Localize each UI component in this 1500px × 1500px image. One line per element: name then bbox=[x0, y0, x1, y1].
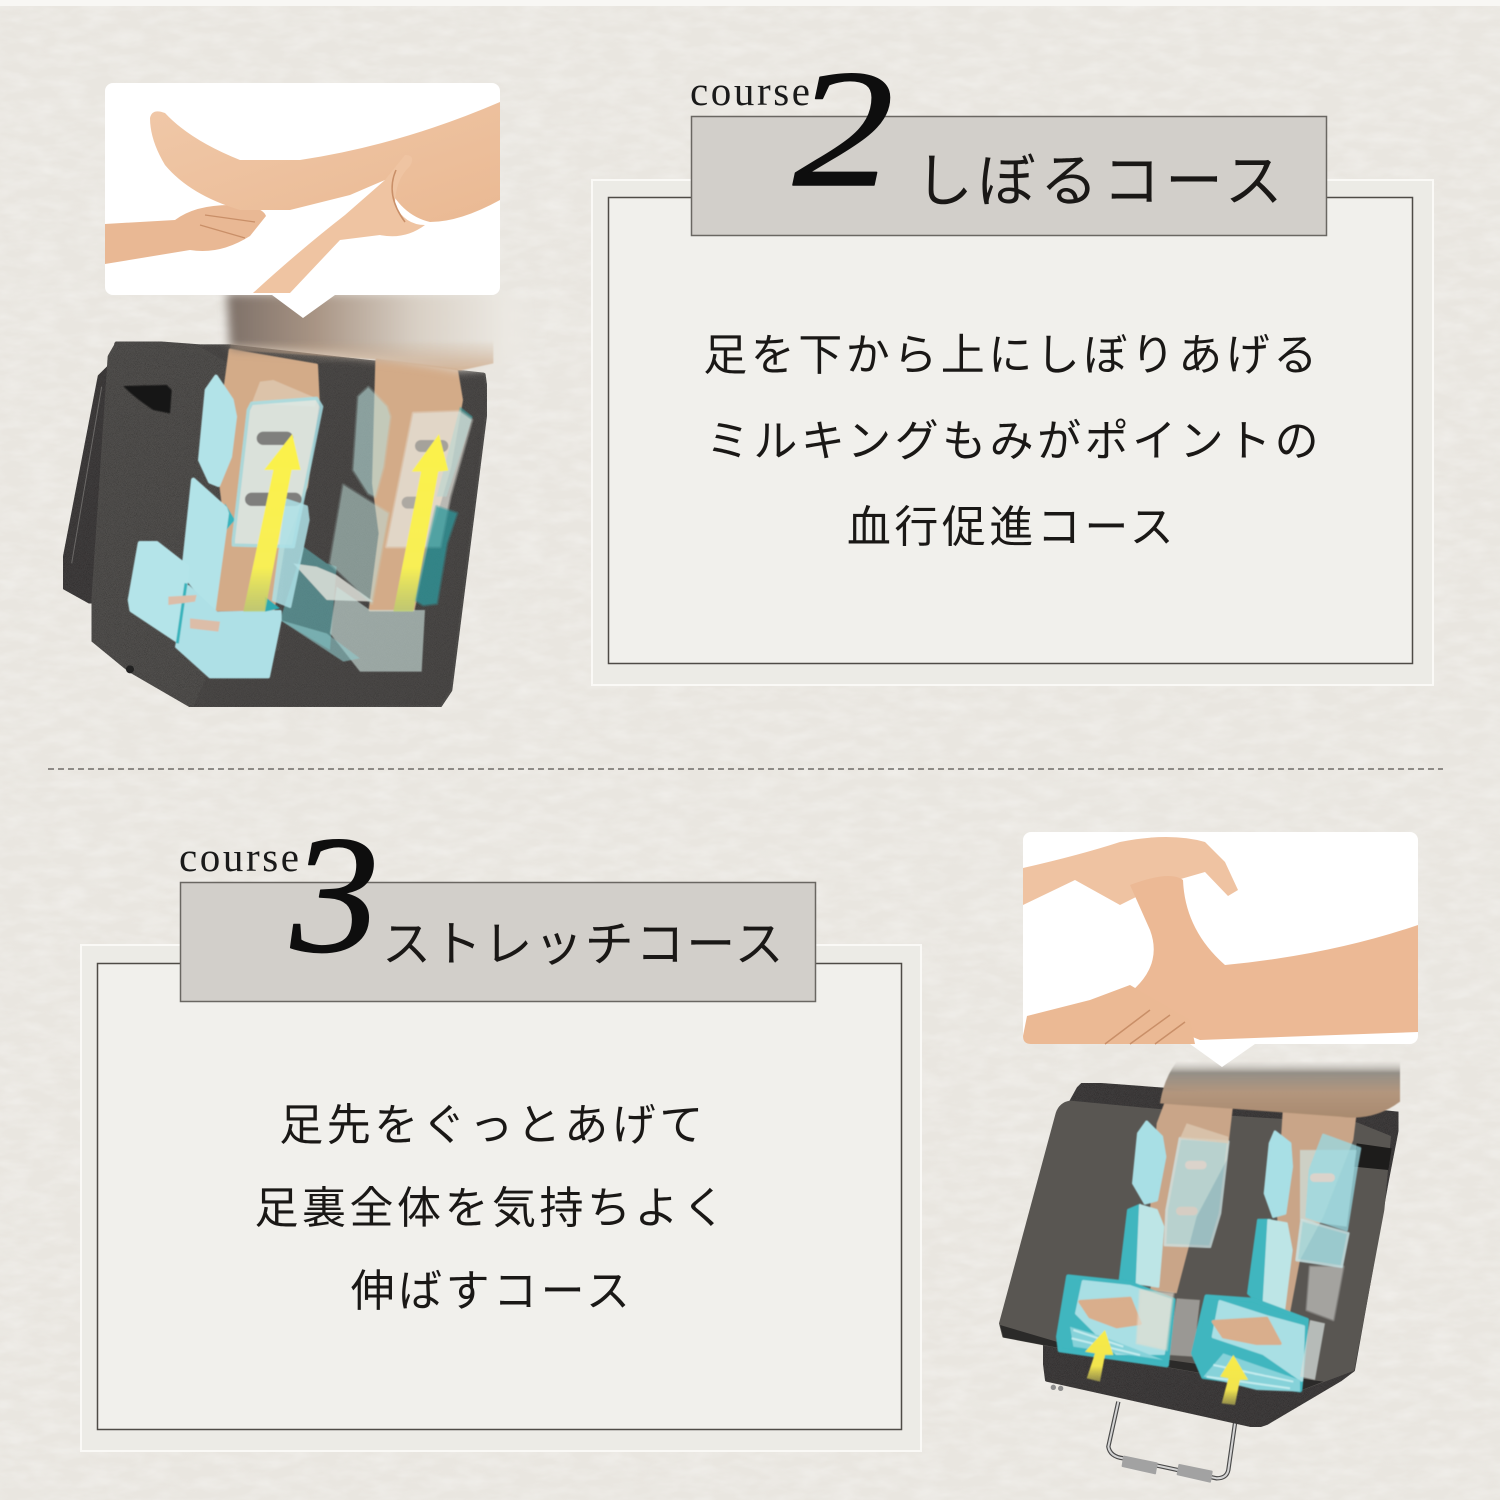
panel: course 2 frame bbox=[592, 180, 1433, 685]
text block: course 3 description: 足裏全体を気持ちよく bbox=[254, 1184, 730, 1233]
heading band: course 2 bbox=[692, 116, 1326, 236]
heading: しぼるコース: しぼるコース bbox=[915, 149, 1287, 214]
text block: course 2 description: 血行促進コース bbox=[847, 503, 1177, 552]
callout: squeezing massage photo bbox=[105, 83, 500, 318]
device illustration: course 2 bbox=[63, 293, 540, 707]
numeral 2: 2 bbox=[793, 37, 894, 222]
text block: course 3 description: 足先をぐっとあげて bbox=[279, 1101, 707, 1150]
text block: course 2 description: ミルキングもみがポイントの bbox=[706, 417, 1322, 466]
text block: course 2 description: 足を下から上にしぼりあげる bbox=[703, 331, 1321, 380]
text block: course 3 description: 伸ばすコース bbox=[351, 1267, 633, 1316]
panel: course 3 frame bbox=[81, 945, 921, 1451]
text block: course 2 description bbox=[703, 331, 1322, 552]
heading: ストレッチコース: ストレッチコース bbox=[382, 918, 785, 972]
text block: course 3 description bbox=[254, 1101, 730, 1316]
label: course 2: course bbox=[690, 68, 813, 114]
divider bbox=[48, 768, 1443, 770]
numeral 3: 3 bbox=[290, 803, 379, 988]
heading band: course 3 bbox=[180, 882, 816, 1002]
label: course 3: course bbox=[179, 834, 302, 880]
device illustration: course 3 bbox=[1000, 1062, 1400, 1482]
callout: stretching photo bbox=[1023, 832, 1418, 1067]
